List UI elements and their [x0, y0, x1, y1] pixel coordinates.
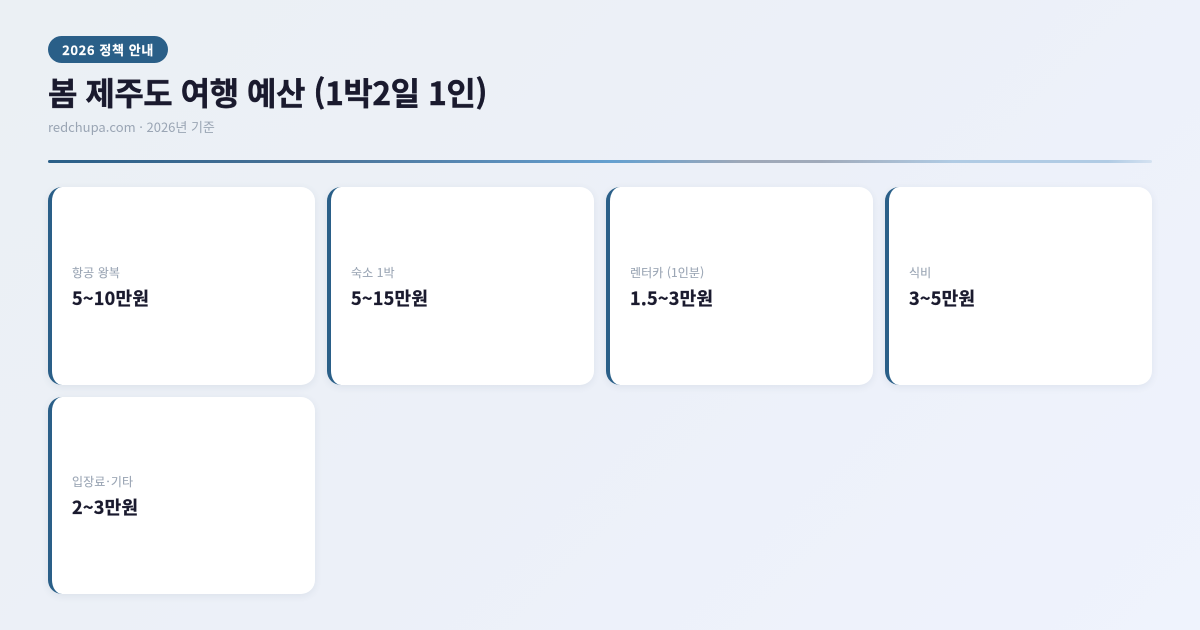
- panel: food: [885, 187, 1152, 385]
- lodging label: 숙소 1박: [351, 264, 395, 281]
- panel: lodging: [327, 187, 594, 385]
- panel: admission and other: [48, 397, 315, 594]
- badge: [48, 36, 168, 63]
- admission label: 입장료·기타: [72, 473, 133, 490]
- rental car label: 렌터카 (1인분): [630, 264, 704, 281]
- flight value: 5~10만원: [72, 285, 149, 311]
- panel: rental car: [606, 187, 873, 385]
- lodging value: 5~15만원: [351, 285, 428, 311]
- badge: 2026 정책 안내: [62, 40, 154, 59]
- panel: flight: [48, 187, 315, 385]
- title: 봄 제주도 여행 예산 (1박2일 1인): [48, 69, 487, 115]
- food label: 식비: [909, 264, 931, 281]
- food value: 3~5만원: [909, 285, 975, 311]
- admission value: 2~3만원: [72, 494, 138, 520]
- rental car value: 1.5~3만원: [630, 285, 713, 311]
- flight label: 항공 왕복: [72, 264, 120, 281]
- subtitle: redchupa.com · 2026년 기준: [48, 117, 215, 136]
